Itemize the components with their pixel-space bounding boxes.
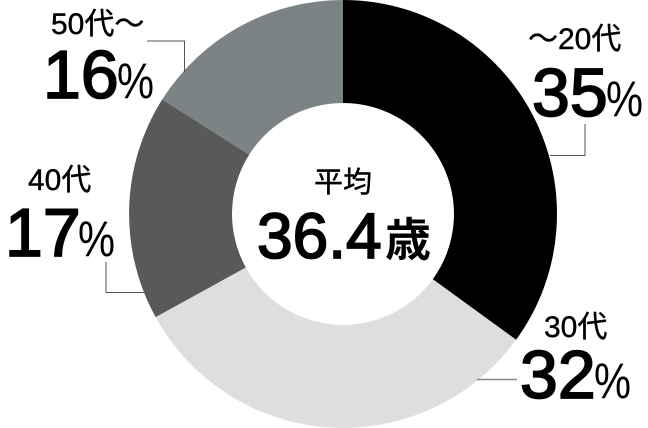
label: 40s: 17: [5, 195, 81, 271]
label: 30s: 30代: [544, 311, 607, 344]
donut chart: [129, 0, 557, 428]
label: 30s: 32: [520, 337, 596, 413]
segment: 30s 32%: [156, 268, 516, 428]
label: 30s: %: [594, 353, 631, 409]
label: up to 20s: 35: [532, 55, 608, 131]
segment: 40s 17%: [129, 100, 249, 317]
leader line: 30s: [477, 378, 517, 380]
label: up to 20s: [528, 23, 643, 131]
center label: average age: 平均: [314, 166, 372, 199]
label: 50s and over: 16: [43, 37, 119, 113]
segment: up to 20s 35%: [343, 0, 557, 340]
leader line: up to 20s: [550, 124, 585, 156]
leader line: 50s: [147, 41, 184, 72]
center label: average age: 36.4: [257, 200, 382, 272]
label: 50s and over: [43, 8, 154, 113]
center label: average age: 歳: [385, 204, 431, 270]
label: up to 20s: ～20代: [528, 23, 621, 56]
label: 50s and over: %: [117, 53, 154, 109]
label: 40s: [5, 164, 115, 271]
leader line: 40s: [106, 262, 146, 292]
label: 40s: 40代: [28, 164, 91, 197]
label: 50s and over: 50代～: [51, 8, 144, 41]
center label: average age: [257, 166, 431, 272]
label: 30s: [520, 311, 631, 413]
segment: 50s and over 16%: [162, 0, 343, 155]
label: 40s: %: [78, 211, 115, 267]
